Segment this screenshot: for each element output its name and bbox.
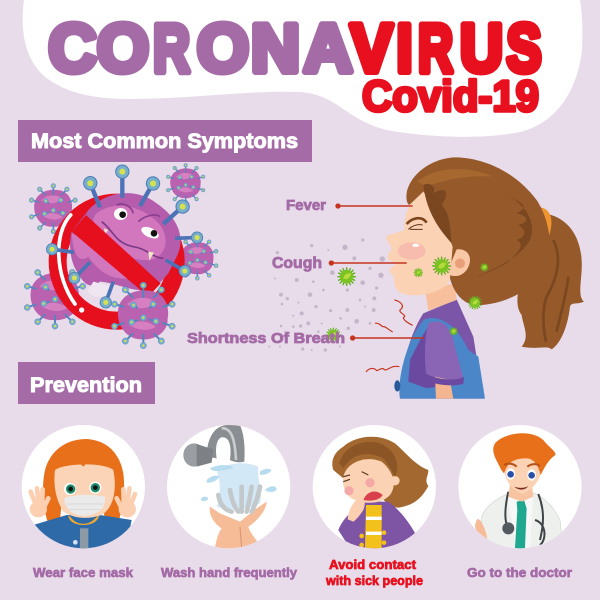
girl neck (425, 283, 457, 311)
icon: hands washing under tap (167, 425, 290, 548)
label: Wash hand frequently: Wash hand frequently (161, 565, 298, 580)
label: Avoid contact with sick people: with sick people (325, 573, 423, 588)
heading: Prevention: Prevention (30, 374, 142, 397)
girl face (386, 192, 455, 295)
subtitle: Covid-19: Covid-19 (362, 72, 539, 121)
pointer: fever (335, 203, 413, 209)
word: CORONA: O (197, 10, 249, 86)
label: Shortness Of Breath: Shortness Of Breath (187, 331, 345, 347)
panel: wear face mask and wash hand illustrations (22, 425, 290, 552)
virus germs on girl (326, 257, 488, 342)
word: VIRUS: V (350, 10, 392, 86)
girl ear (447, 249, 470, 276)
slash bar (72, 215, 161, 297)
label: Cough: Cough (272, 255, 322, 272)
girl body and overalls (394, 299, 485, 399)
large front virus (111, 282, 175, 349)
word: CORONA: C (48, 10, 96, 86)
title blob background (23, 0, 582, 137)
word: VIRUS: I (396, 10, 412, 86)
girl ponytail (517, 207, 584, 349)
label: Go to the doctor: Go to the doctor (467, 565, 572, 580)
word: VIRUS: U (460, 10, 503, 86)
shiver squiggles (366, 300, 413, 372)
panel: avoid contact and doctor illustrations (313, 425, 582, 550)
label: Avoid contact with sick people (325, 557, 423, 588)
word: CORONA: O (97, 10, 149, 86)
icon: girl coughing into hand (313, 425, 436, 548)
heading: Most Common Symptoms (18, 120, 312, 162)
respiratory droplets (268, 238, 385, 352)
ring highlight (59, 215, 84, 313)
word: CORONA: N (251, 10, 300, 86)
prohibition ring (58, 203, 176, 321)
word: CORONA: A (304, 10, 352, 86)
virus prohibition illustration (24, 163, 218, 349)
small viruses behind (24, 163, 218, 329)
blue spikes of main virus (46, 165, 203, 310)
label: Avoid contact with sick people: Avoid contact (329, 557, 417, 572)
heading: Most Common Symptoms: Most Common Symptoms (31, 130, 298, 153)
word: CORONA: R (153, 10, 190, 86)
symptom labels and girl illustration (268, 157, 584, 399)
girl hair (406, 157, 550, 305)
pointer: cough (329, 260, 407, 266)
label: Wear face mask: Wear face mask (33, 565, 134, 580)
heading: Prevention (18, 362, 155, 404)
title: Coronavirus Covid-19 (48, 10, 542, 121)
word: VIRUS: S (506, 10, 542, 86)
pointer: shortness of breath (350, 335, 424, 341)
word: VIRUS: R (418, 10, 453, 86)
word: VIRUS (350, 10, 542, 86)
icon: doctor with stethoscope (458, 425, 582, 550)
icon: girl with face mask (22, 425, 145, 552)
angry virus character (70, 193, 181, 297)
word: CORONA (48, 10, 352, 86)
label: Fever: Fever (286, 198, 326, 214)
